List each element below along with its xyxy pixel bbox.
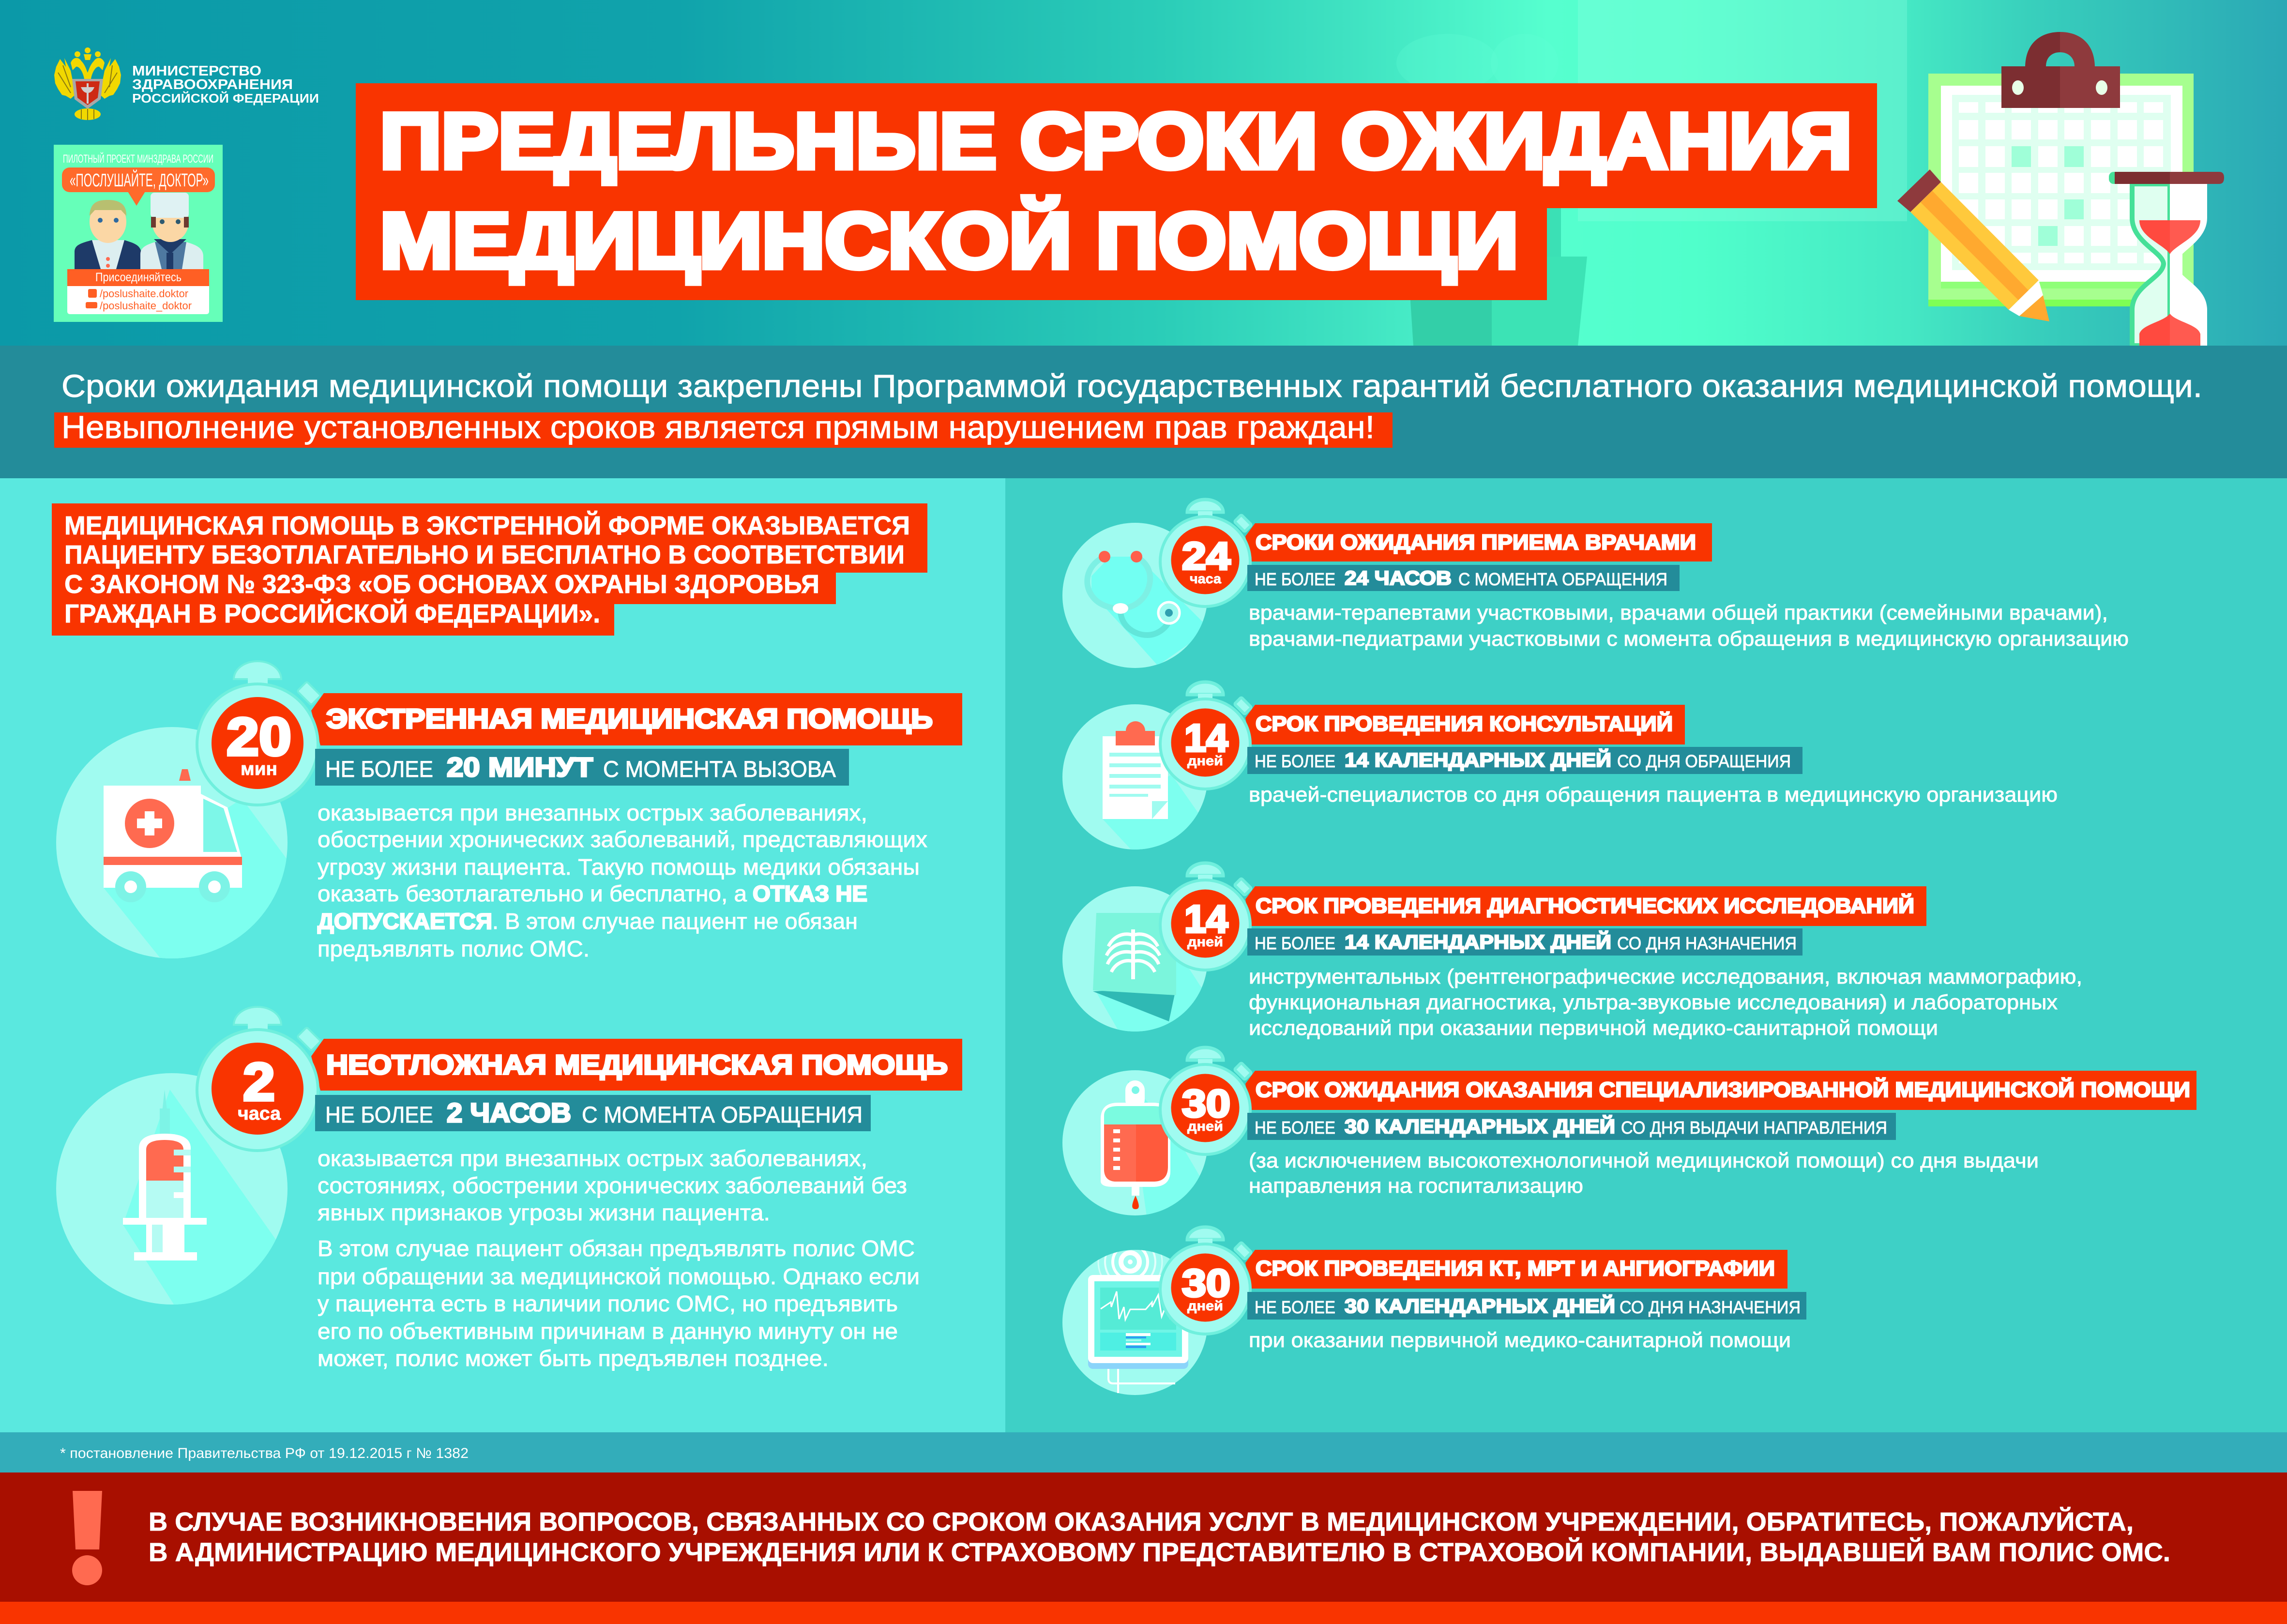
card: pilot project: ПИЛОТНЫЙ ПРОЕКТ МИНЗДРАВА РОССИИ bbox=[63, 152, 213, 166]
text: urgent care: явных признаков угрозы жизни пациента. bbox=[318, 1200, 770, 1225]
icon: clipboard document bbox=[1062, 704, 1206, 850]
icon: syringe bbox=[56, 1073, 288, 1305]
card: pilot project bbox=[54, 145, 223, 322]
intro band: Невыполнение установленных сроков является прямым нарушением прав граждан! bbox=[61, 409, 1375, 445]
illustration: pencil bbox=[1897, 169, 2049, 321]
heading: doctors bbox=[1245, 523, 1712, 562]
card: pilot project: /poslushaite.doktor bbox=[100, 288, 188, 300]
time limit: 30 days: НЕ БОЛЕЕ bbox=[1255, 1297, 1335, 1317]
ministry name bbox=[132, 63, 319, 106]
panel: right background bbox=[1005, 478, 2287, 1432]
illustration: hourglass bbox=[2109, 172, 2224, 346]
text: emergency care: обострении хронических заболеваний, представляющих bbox=[318, 827, 927, 852]
text: diagnostics: функциональная диагностика, ультра-звуковые исследования) и лабораторных bbox=[1249, 991, 2058, 1014]
time limit: 14 days: СО ДНЯ ОБРАЩЕНИЯ bbox=[1617, 751, 1791, 771]
callout: emergency care law: ГРАЖДАН В РОССИЙСКОЙ ФЕДЕРАЦИИ». bbox=[64, 599, 600, 628]
time limit: 2 hours: 2 ЧАСОВ bbox=[447, 1097, 571, 1128]
stopwatch: 2 hours: 2 bbox=[243, 1052, 275, 1112]
row: doctors bbox=[1062, 500, 2129, 668]
card: pilot project: Присоединяйтесь bbox=[95, 271, 182, 284]
text: urgent care bbox=[318, 1146, 920, 1371]
callout: emergency care law bbox=[52, 503, 927, 636]
intro band bbox=[0, 346, 2287, 478]
stopwatch: 14 days: дней bbox=[1187, 753, 1223, 768]
stopwatch: 14 days: дней bbox=[1187, 934, 1223, 949]
text: urgent care: при обращении за медицинской помощью. Однако если bbox=[318, 1264, 920, 1289]
stopwatch: 30 days: 30 bbox=[1182, 1261, 1230, 1305]
heading: CT MRI angiography: СРОК ПРОВЕДЕНИЯ КТ, МРТ И АНГИОГРАФИИ bbox=[1256, 1257, 1775, 1280]
stopwatch: 14 days: 14 bbox=[1184, 897, 1228, 941]
icon: x-ray bbox=[1062, 886, 1207, 1032]
time limit: 14 days: 14 КАЛЕНДАРНЫХ ДНЕЙ bbox=[1345, 931, 1611, 953]
text: emergency care bbox=[318, 800, 927, 961]
heading: emergency care bbox=[311, 693, 962, 745]
time limit: 14 days: НЕ БОЛЕЕ bbox=[1255, 933, 1335, 953]
time limit: 14 days: СО ДНЯ НАЗНАЧЕНИЯ bbox=[1617, 933, 1797, 953]
text: specialized care: (за исключением высокотехнологичной медицинской помощи) со дня выдачи bbox=[1249, 1149, 2039, 1172]
title bbox=[356, 83, 1877, 300]
text: emergency care: ОТКАЗ НЕ bbox=[753, 881, 867, 906]
text: doctors: врачами-терапевтами участковыми, врачами общей практики (семейными врачами), bbox=[1249, 601, 2108, 624]
heading: specialized care: СРОК ОЖИДАНИЯ ОКАЗАНИЯ СПЕЦИАЛИЗИРОВАННОЙ МЕДИЦИНСКОЙ ПОМОЩИ bbox=[1256, 1077, 2190, 1102]
stopwatch: 24 hours: 24 bbox=[1182, 534, 1231, 577]
time limit: 30 days: НЕ БОЛЕЕ bbox=[1255, 1118, 1335, 1138]
text: diagnostics bbox=[1249, 965, 2082, 1040]
time limit: 20 minutes: 20 МИНУТ bbox=[447, 752, 593, 782]
time limit: 30 days bbox=[1247, 1113, 1896, 1140]
stopwatch: 24 hours bbox=[1159, 500, 1252, 608]
time limit: 20 minutes: С МОМЕНТА ВЫЗОВА bbox=[603, 756, 836, 782]
title: ПРЕДЕЛЬНЫЕ СРОКИ ОЖИДАНИЯ bbox=[380, 97, 1852, 185]
callout: emergency care law: ПАЦИЕНТУ БЕЗОТЛАГАТЕЛЬНО И БЕСПЛАТНО В СООТВЕТСТВИИ bbox=[64, 540, 905, 569]
stopwatch: 30 days bbox=[1159, 1227, 1252, 1336]
callout: emergency care law: С ЗАКОНОМ № 323-ФЗ «ОБ ОСНОВАХ ОХРАНЫ ЗДОРОВЬЯ bbox=[64, 570, 819, 599]
title: МЕДИЦИНСКОЙ ПОМОЩИ bbox=[380, 197, 1518, 285]
text: urgent care: может, полис может быть предъявлен позднее. bbox=[318, 1346, 829, 1371]
time limit: 14 days: 14 КАЛЕНДАРНЫХ ДНЕЙ bbox=[1345, 749, 1611, 771]
text: doctors: врачами-педиатрами участковыми с момента обращения в медицинскую организацию bbox=[1249, 627, 2129, 651]
text: emergency care: ДОПУСКАЕТСЯ bbox=[318, 909, 492, 934]
ministry name: РОССИЙСКОЙ ФЕДЕРАЦИИ bbox=[132, 91, 319, 106]
text: doctors bbox=[1249, 601, 2129, 651]
warning text: В СЛУЧАЕ ВОЗНИКНОВЕНИЯ ВОПРОСОВ, СВЯЗАННЫХ СО СРОКОМ ОКАЗАНИЯ УСЛУГ В МЕДИЦИНСКОМ УЧРЕЖДЕНИИ, ОБРАТИТЕСЬ, ПОЖАЛУЙСТА, bbox=[149, 1507, 2134, 1536]
text: emergency care: оказывается при внезапных острых заболеваниях, bbox=[318, 800, 867, 825]
stopwatch: 20 minutes bbox=[196, 661, 321, 806]
section: urgent care bbox=[56, 1007, 962, 1371]
time limit: 30 days: 30 КАЛЕНДАРНЫХ ДНЕЙ bbox=[1345, 1115, 1615, 1138]
time limit: 14 days: НЕ БОЛЕЕ bbox=[1255, 751, 1335, 771]
heading: consultations: СРОК ПРОВЕДЕНИЯ КОНСУЛЬТАЦИЙ bbox=[1256, 711, 1673, 736]
icon: monitor bbox=[1062, 1230, 1208, 1395]
heading: CT MRI angiography bbox=[1245, 1250, 1787, 1289]
row: CT MRI angiography bbox=[1062, 1227, 1806, 1395]
text: urgent care: состояниях, обострении хронических заболеваний без bbox=[318, 1173, 907, 1198]
time limit: 30 days: СО ДНЯ ВЫДАЧИ НАПРАВЛЕНИЯ bbox=[1621, 1118, 1887, 1138]
text: consultations: врачей-специалистов со дня обращения пациента в медицинскую организацию bbox=[1249, 783, 2058, 806]
time limit: 24 hours: С МОМЕНТА ОБРАЩЕНИЯ bbox=[1458, 569, 1667, 589]
stopwatch: 30 days: дней bbox=[1187, 1119, 1223, 1134]
heading: emergency care: ЭКСТРЕННАЯ МЕДИЦИНСКАЯ ПОМОЩЬ bbox=[326, 703, 933, 734]
warning band bbox=[0, 1472, 2287, 1602]
time limit: 24 hours: НЕ БОЛЕЕ bbox=[1255, 569, 1335, 589]
text: diagnostics: исследований при оказании первичной медико-санитарной помощи bbox=[1249, 1017, 1938, 1040]
heading: diagnostics: СРОК ПРОВЕДЕНИЯ ДИАГНОСТИЧЕСКИХ ИССЛЕДОВАНИЙ bbox=[1256, 893, 1914, 918]
text: urgent care: его по объективным причинам в данную минуту он не bbox=[318, 1319, 898, 1344]
heading: consultations bbox=[1245, 705, 1685, 744]
time limit: 30 days: 30 КАЛЕНДАРНЫХ ДНЕЙ bbox=[1345, 1295, 1615, 1317]
section: emergency care bbox=[56, 661, 962, 987]
text: specialized care: направления на госпитализацию bbox=[1249, 1174, 1583, 1198]
footnote bbox=[0, 1432, 2287, 1472]
row: specialized care bbox=[1062, 1047, 2196, 1220]
bottom strip bbox=[0, 1602, 2287, 1624]
icon: exclamation mark bbox=[72, 1491, 102, 1585]
time limit: 2 hours: С МОМЕНТА ОБРАЩЕНИЯ bbox=[582, 1102, 863, 1127]
card: pilot project: «ПОСЛУШАЙТЕ, ДОКТОР» bbox=[70, 169, 209, 191]
text: specialized care bbox=[1249, 1149, 2039, 1198]
icon: stethoscope bbox=[1062, 523, 1210, 668]
text: diagnostics: инструментальных (рентгенографические исследования, включая маммографию, bbox=[1249, 965, 2082, 988]
stopwatch: 30 days: дней bbox=[1187, 1298, 1223, 1313]
time limit: 2 hours bbox=[315, 1095, 871, 1131]
stopwatch: 20 minutes: 20 bbox=[227, 707, 291, 767]
heading: urgent care bbox=[311, 1039, 962, 1091]
heading: urgent care: НЕОТЛОЖНАЯ МЕДИЦИНСКАЯ ПОМОЩЬ bbox=[326, 1049, 948, 1080]
text: urgent care: В этом случае пациент обязан предъявлять полис ОМС bbox=[318, 1236, 915, 1261]
stopwatch: 2 hours: часа bbox=[238, 1104, 281, 1124]
ministry name: МИНИСТЕРСТВО bbox=[132, 63, 261, 79]
text: emergency care: предъявлять полис ОМС. bbox=[318, 936, 590, 961]
icon: ambulance bbox=[56, 727, 288, 958]
time limit: 14 days bbox=[1247, 747, 1802, 774]
time limit: 24 hours bbox=[1247, 565, 1680, 591]
ministry name: ЗДРАВООХРАНЕНИЯ bbox=[132, 77, 293, 92]
warning text bbox=[149, 1507, 2170, 1567]
ministry emblem bbox=[54, 47, 121, 120]
text: urgent care: у пациента есть в наличии полис ОМС, но предъявить bbox=[318, 1291, 898, 1316]
icon: blood bag bbox=[1062, 1070, 1220, 1220]
card: pilot project: /poslushaite_doktor bbox=[100, 300, 192, 312]
time limit: 14 days bbox=[1247, 928, 1802, 956]
heading: doctors: СРОКИ ОЖИДАНИЯ ПРИЕМА ВРАЧАМИ bbox=[1256, 531, 1696, 554]
panel: left background bbox=[0, 478, 1005, 1432]
heading: diagnostics bbox=[1245, 886, 1926, 926]
stopwatch: 14 days bbox=[1159, 682, 1252, 790]
time limit: 20 minutes: НЕ БОЛЕЕ bbox=[325, 756, 433, 782]
time limit: 2 hours: НЕ БОЛЕЕ bbox=[325, 1102, 433, 1127]
callout: emergency care law: МЕДИЦИНСКАЯ ПОМОЩЬ В ЭКСТРЕННОЙ ФОРМЕ ОКАЗЫВАЕТСЯ bbox=[64, 511, 910, 540]
time limit: 30 days bbox=[1247, 1292, 1806, 1320]
text: emergency care: . В этом случае пациент не обязан bbox=[492, 909, 858, 934]
header background bbox=[0, 0, 2287, 346]
time limit: 20 minutes bbox=[315, 749, 849, 786]
text: CT MRI angiography: при оказании первичной медико-санитарной помощи bbox=[1249, 1329, 1791, 1352]
stopwatch: 30 days: 30 bbox=[1182, 1082, 1230, 1125]
text: emergency care: угрозу жизни пациента. Такую помощь медики обязаны bbox=[318, 854, 920, 880]
row: consultations bbox=[1062, 681, 2057, 850]
text: urgent care: оказывается при внезапных острых заболеваниях, bbox=[318, 1146, 867, 1171]
warning text: В АДМИНИСТРАЦИЮ МЕДИЦИНСКОГО УЧРЕЖДЕНИЯ ИЛИ К СТРАХОВОМУ ПРЕДСТАВИТЕЛЮ В СТРАХОВОЙ КОМПАНИИ, ВЫДАВШЕЙ ВАМ ПОЛИС ОМС. bbox=[149, 1537, 2170, 1567]
row: diagnostics bbox=[1062, 863, 2082, 1055]
heading: specialized care bbox=[1245, 1071, 2196, 1110]
stopwatch: 2 hours bbox=[196, 1007, 321, 1152]
stopwatch: 14 days bbox=[1159, 863, 1252, 971]
stopwatch: 20 minutes: мин bbox=[241, 759, 277, 779]
footnote: * постановление Правительства РФ от 19.12.2015 г № 1382 bbox=[60, 1445, 469, 1461]
time limit: 30 days: СО ДНЯ НАЗНАЧЕНИЯ bbox=[1620, 1297, 1801, 1317]
time limit: 24 hours: 24 ЧАСОВ bbox=[1345, 567, 1452, 589]
intro band: Сроки ожидания медицинской помощи закреплены Программой государственных гарантий бесплатного оказания медицинской помощи. bbox=[61, 368, 2202, 404]
illustration: clipboard bbox=[1928, 32, 2194, 306]
stopwatch: 30 days bbox=[1159, 1047, 1252, 1156]
text: emergency care: оказать безотлагательно и бесплатно, а bbox=[318, 881, 747, 906]
stopwatch: 14 days: 14 bbox=[1184, 716, 1228, 759]
stopwatch: 24 hours: часа bbox=[1190, 571, 1221, 586]
